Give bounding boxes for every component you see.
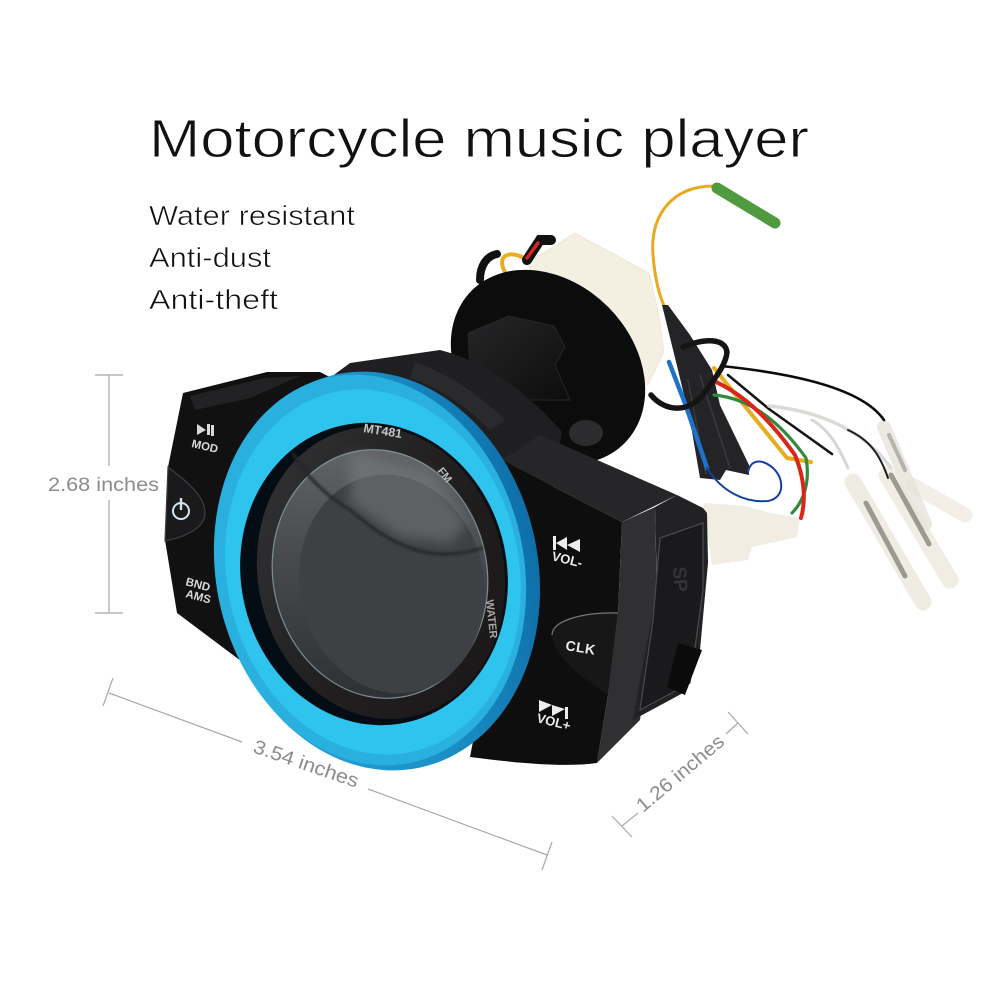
power button: [165, 467, 205, 541]
dimension: width 3.54 inches: 3.54 inches: [250, 736, 362, 793]
dimension: width 3.54 inches: [103, 678, 552, 870]
short wires above connector: [480, 240, 551, 280]
blue ring and lens: FM: [435, 465, 454, 485]
mounting bracket disc: [412, 231, 684, 503]
dimension: depth 1.26 inches: 1.26 inches: [632, 730, 729, 817]
wire loom: [653, 186, 891, 518]
VOL labels: VOL+: [535, 710, 573, 733]
dimension: height 2.68 inches: [48, 375, 159, 613]
blue ring and lens: MT481: [363, 421, 403, 441]
CLK button: CLK: [565, 637, 597, 658]
white connector block: [527, 233, 664, 385]
feature list: Water resistant: [149, 200, 355, 231]
cable tie: [651, 341, 727, 408]
MOD and BND AMS labels: AMS: [184, 588, 212, 607]
dimension: depth 1.26 inches: [612, 712, 748, 837]
SP rubber cover: SP: [668, 566, 691, 593]
MOD and BND AMS labels: BND: [184, 576, 211, 594]
CLK button: [552, 613, 618, 695]
VOL labels: [535, 536, 584, 733]
MOD and BND AMS labels: MOD: [190, 438, 219, 456]
SP rubber cover: [640, 523, 703, 710]
feature list: Anti-dust: [149, 242, 271, 273]
feature list: Anti-theft: [149, 284, 278, 315]
bottom white connector: [703, 503, 800, 565]
VOL labels: VOL-: [550, 548, 584, 570]
black tab: [667, 643, 702, 695]
MOD and BND AMS labels: [184, 424, 219, 607]
dimension: height 2.68 inches: 2.68 inches: [48, 474, 159, 496]
title: Motorcycle music player: [149, 109, 809, 169]
terminal sleeves: [853, 427, 965, 602]
feature list: [149, 200, 355, 315]
rear housing: [300, 350, 562, 560]
right button panel: [470, 435, 708, 765]
blue ring and lens: WATER: [483, 599, 499, 639]
blue ring and lens: [178, 341, 576, 801]
left button panel: [165, 372, 345, 670]
